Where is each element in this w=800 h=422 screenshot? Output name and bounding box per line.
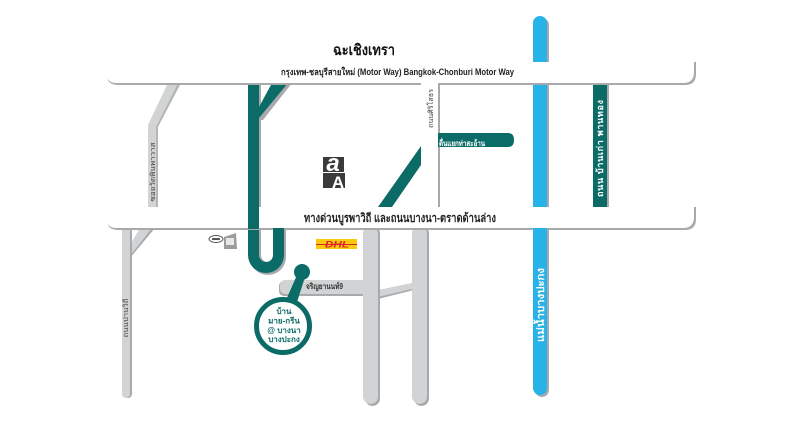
- label: Ban Kao Phan Thong road: ถนน บ้านเก่า พานทอง: [595, 100, 605, 197]
- label: Wat Phin Phawat soi: ซอยวัดพินพาวาส: [149, 142, 157, 202]
- road: lower left grey: [122, 222, 155, 398]
- road: motorway band: [108, 62, 696, 85]
- logo: DHL: DHL: [325, 240, 349, 250]
- label: Charoen Yan 9 street: จริญยานนท์9: [306, 281, 343, 292]
- road: central grey pair with connector: [363, 226, 429, 406]
- marker label: @ บางนา: [267, 326, 301, 335]
- logo: DHL: [316, 239, 357, 250]
- road: upper left grey soi: [148, 83, 181, 207]
- logo: small oval and sign: [209, 233, 237, 249]
- road: Charoen Yan side street: [279, 280, 369, 296]
- road: teal overpass loop and branch: [248, 83, 292, 275]
- marker label: บ้าน: [276, 306, 292, 316]
- label: Bang Pakong river: แม่น้ำบางปะกง: [533, 268, 547, 342]
- label: Burapha Withi expressway: ทางด่วนบูรพาวิถี และถนนบางนา-ตราดด้านล่าง: [304, 211, 496, 226]
- marker label: มาย-กรีน: [268, 316, 300, 326]
- marker: project location pin: [256, 264, 310, 352]
- road: Burapha Withi band: [108, 207, 696, 230]
- label: Sirisothon road: ถนนศิริโสธร: [426, 89, 435, 128]
- logo: a/A building: a: [326, 150, 340, 177]
- road: teal diagonal: [378, 146, 421, 207]
- label: Pan Withi road: ถนนปานวิถี: [122, 298, 130, 338]
- logo: a/A building: [323, 150, 345, 192]
- heading: Chachoengsao: ฉะเชิงเทรา: [333, 41, 395, 59]
- marker label: บางปะกง: [268, 335, 300, 344]
- logo: a/A building: A: [332, 173, 344, 192]
- road: river and teal crossings restored over bands: [248, 205, 547, 234]
- road: white Sirisothon shadow edge: [438, 83, 440, 208]
- road: white Sirisothon gap: [421, 83, 438, 86]
- label: motorway: กรุงเทพ-ชลบุรีสายใหม่ (Motor Way) Bangkok-Chonburi Motor Way: [281, 66, 514, 78]
- road: teal Tha Sa-an branch: [438, 133, 514, 147]
- label: Tha Sa-an junction: ตื่นแยกท่าสะอ้าน: [439, 137, 485, 148]
- road: blue river: [533, 16, 549, 397]
- road: teal right Ban Kao Phan Thong: [593, 83, 609, 208]
